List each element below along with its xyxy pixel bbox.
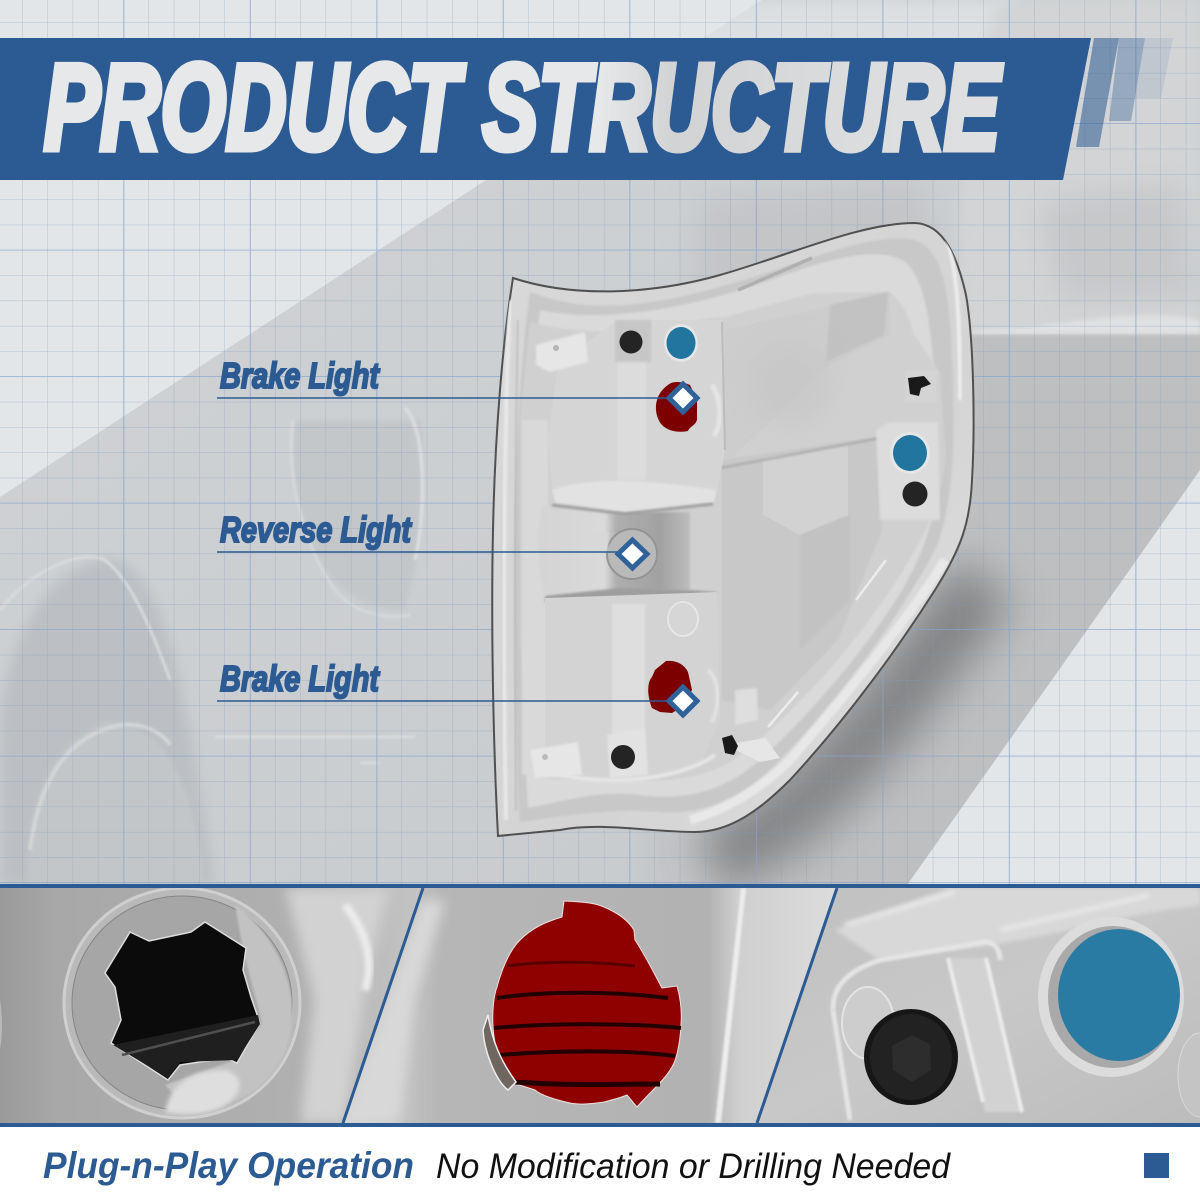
lamp drop shadow <box>710 580 985 862</box>
footer <box>0 1127 1200 1200</box>
footer text: No Modification or Drilling Needed <box>436 1147 951 1186</box>
background: grid paper with truck photo <box>0 0 1200 884</box>
upper brake light housing <box>548 320 725 514</box>
rim channel <box>514 238 953 822</box>
banner accent stripes <box>1076 38 1173 147</box>
left corner mount upper <box>536 332 588 372</box>
central reverse socket <box>538 507 717 602</box>
callout: brake light lower <box>217 658 697 715</box>
black fasteners <box>611 330 931 769</box>
callout: reverse light: Reverse Light <box>220 509 413 550</box>
black fastener <box>864 1009 958 1105</box>
lower clip tab <box>735 688 758 725</box>
lens <box>493 901 681 1107</box>
blue vent <box>1058 929 1180 1061</box>
truck headlight <box>296 423 419 556</box>
rim groove <box>738 258 812 290</box>
blue vents <box>664 324 930 474</box>
title banner <box>0 38 1091 180</box>
footer square <box>1144 1153 1169 1178</box>
panel: socket opening close-up <box>0 888 424 1124</box>
callout: brake light upper <box>217 355 697 412</box>
callout: reverse light <box>217 509 647 568</box>
hole <box>105 922 260 1080</box>
lamp housing <box>492 223 974 836</box>
right flat panels <box>724 292 890 465</box>
panel: fastener and vent close-up <box>757 888 1200 1124</box>
strip frame <box>0 886 1200 1125</box>
truck photo diagonal band <box>0 0 1200 884</box>
lower brake light housing <box>535 592 720 782</box>
right bracket <box>876 422 940 520</box>
tail lamp rear view <box>492 223 974 836</box>
bolt mount bracket upper <box>615 320 651 362</box>
left pillar <box>522 420 548 775</box>
callout: brake light upper: Brake Light <box>220 355 381 396</box>
callout: brake light lower: Brake Light <box>220 658 381 699</box>
footer heading: Plug-n-Play Operation <box>43 1145 414 1186</box>
right clip bracket <box>905 370 937 402</box>
truck fender and tyre <box>0 560 215 885</box>
left corner mount lower <box>530 742 582 778</box>
red bulb openings <box>648 382 697 713</box>
detail strip <box>0 885 1200 1127</box>
panel: red lens close-up <box>343 888 837 1124</box>
